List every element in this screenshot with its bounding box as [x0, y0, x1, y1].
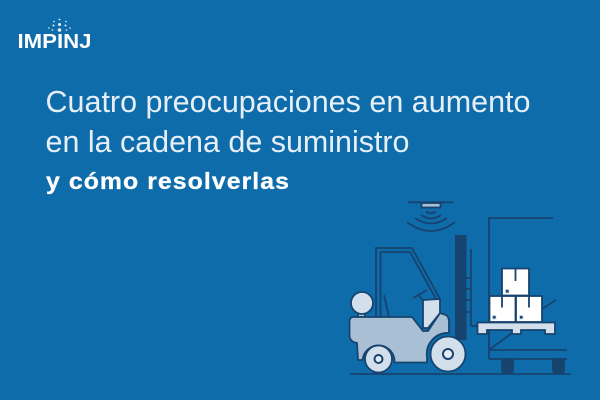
- large wheel: [430, 336, 466, 372]
- logo wordmark: IMPINJ: [18, 31, 92, 53]
- illustration: forklift and pallet: [350, 202, 571, 374]
- title line 2: en la cadena de suministro: [46, 124, 410, 159]
- RFID reader: [407, 202, 455, 231]
- mast ladder: [466, 249, 478, 326]
- rack: [489, 218, 567, 373]
- mast: [455, 235, 466, 340]
- subtitle: y cómo resolverlas: [46, 168, 290, 194]
- small wheel: [365, 346, 392, 372]
- logo: Impinj: [18, 19, 92, 53]
- forklift body: [350, 313, 449, 362]
- title: [46, 84, 530, 194]
- box bottom right: [516, 296, 542, 322]
- forklift seat: [423, 299, 440, 328]
- logo dots: [48, 19, 71, 32]
- forklift cab frame: [376, 248, 440, 317]
- counterweight balloon: [351, 292, 373, 317]
- box top: [502, 268, 529, 296]
- box bottom left: [490, 296, 516, 322]
- ground line: [350, 373, 571, 375]
- title line 1: Cuatro preocupaciones en aumento: [46, 84, 530, 119]
- pallet: [478, 322, 555, 334]
